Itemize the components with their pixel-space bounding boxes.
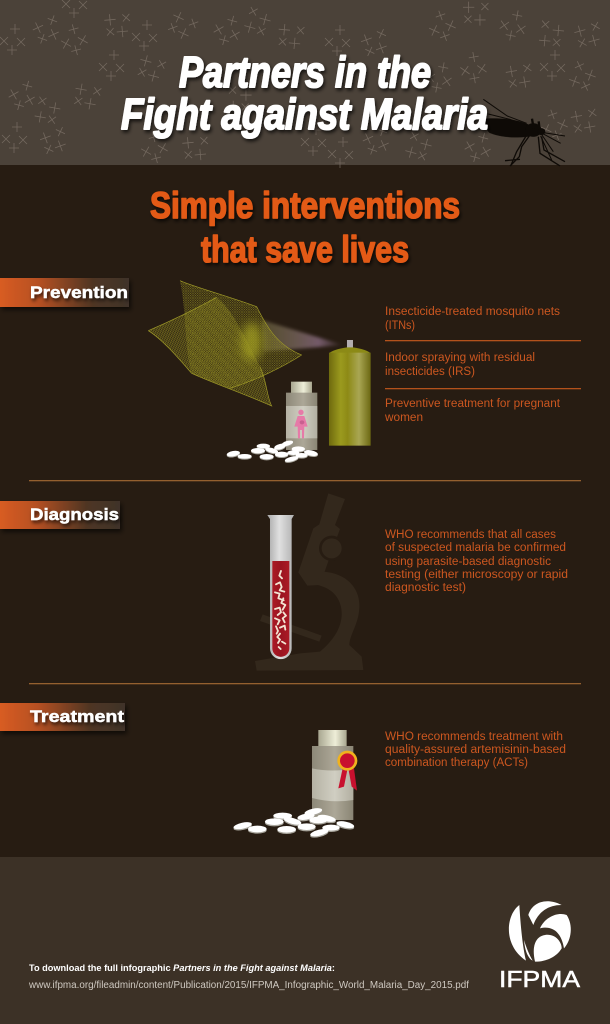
label: Prevention: Prevention xyxy=(30,283,128,302)
prevention text list: Insecticide-treated mosquito nets xyxy=(385,306,560,318)
title xyxy=(121,48,488,139)
treatment text: quality-assured artemisinin-based xyxy=(385,744,566,756)
footer xyxy=(0,857,610,1024)
download note: www.ifpma.org/fileadmin/content/Publication/2015/IFPMA_Infographic_World_Malaria_Day_2015.pdf xyxy=(28,980,469,991)
label: Prevention xyxy=(0,278,129,307)
section: treatment xyxy=(0,703,566,839)
diagnosis text: diagnostic test) xyxy=(385,582,466,594)
diagnosis text xyxy=(385,529,568,594)
spray can xyxy=(329,340,371,446)
diagnosis text: WHO recommends that all cases xyxy=(385,529,556,541)
prevention text list: women xyxy=(384,412,423,424)
icon: microscope silhouette xyxy=(255,493,363,671)
header banner xyxy=(0,0,610,168)
icon: blood test tube xyxy=(267,515,294,659)
insecticide net xyxy=(148,281,302,406)
label: Diagnosis xyxy=(0,501,120,529)
prevention text list: insecticides (IRS) xyxy=(385,366,475,378)
treatment text: combination therapy (ACTs) xyxy=(385,757,528,769)
treatment text xyxy=(385,731,566,769)
medicine bottle xyxy=(312,730,353,820)
diagnosis text: using parasite-based diagnostic xyxy=(385,556,551,568)
section: prevention xyxy=(0,278,581,464)
prevention text list: Preventive treatment for pregnant xyxy=(385,398,561,410)
icon: pregnant woman xyxy=(294,410,308,438)
IFPMA logo: IFPMA xyxy=(499,966,581,992)
prevention text list: Indoor spraying with residual xyxy=(385,352,535,364)
diagnosis text: of suspected malaria be confirmed xyxy=(385,542,566,554)
IFPMA logo xyxy=(499,901,581,992)
treatment text: WHO recommends treatment with xyxy=(385,731,563,743)
label: Treatment: Treatment xyxy=(30,707,124,726)
prevention text list xyxy=(384,306,581,424)
subtitle xyxy=(150,185,460,270)
pills xyxy=(226,440,318,464)
section: diagnosis xyxy=(0,493,568,671)
prevention text list: (ITNs) xyxy=(385,320,415,332)
title: Partners in the xyxy=(179,48,431,97)
pregnancy treatment bottle xyxy=(286,382,317,450)
illustration: net, spray, bottle and pills xyxy=(148,281,371,464)
label: Treatment xyxy=(0,703,125,731)
spray cloud xyxy=(262,320,343,352)
pills xyxy=(233,807,355,839)
icon: mosquito xyxy=(483,99,565,166)
download note xyxy=(28,962,469,991)
label: Diagnosis: Diagnosis xyxy=(30,505,119,524)
subtitle: Simple interventions xyxy=(150,185,460,226)
diagnosis text: testing (either microscopy or rapid xyxy=(385,569,568,581)
subtitle: that save lives xyxy=(201,229,409,270)
icon: quality ribbon xyxy=(337,751,357,791)
title: Fight against Malaria xyxy=(121,90,488,139)
download note: To download the full infographic Partners in the Fight against Malaria: xyxy=(29,962,335,973)
illustration: bottle with ribbon and pills xyxy=(233,730,357,839)
